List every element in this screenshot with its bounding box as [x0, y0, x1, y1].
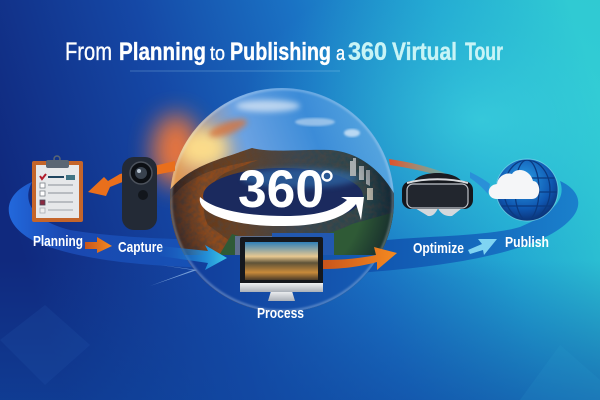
panel: capture camera	[122, 157, 157, 230]
arrow: camera to clipboard	[88, 161, 175, 196]
title: 360	[348, 38, 387, 66]
title: a	[336, 43, 346, 65]
title: Publishing	[230, 38, 331, 66]
top blue swoosh arrowhead	[470, 172, 490, 194]
arrow: process to optimize	[323, 247, 397, 270]
title: Virtual	[392, 38, 457, 66]
arrow: planning to capture	[85, 237, 112, 253]
title: to	[210, 43, 225, 65]
title	[65, 38, 503, 66]
top orange swoosh arrow	[389, 159, 445, 176]
title: Tour	[465, 38, 503, 66]
title: From	[65, 38, 112, 66]
icon: cloud	[489, 170, 539, 199]
panel: VR headset	[402, 173, 473, 216]
arrow: capture to process	[160, 245, 227, 270]
label: Capture: Capture	[118, 239, 163, 256]
right swoosh band	[320, 181, 578, 280]
light streak	[150, 265, 197, 286]
360 degree label: 360	[238, 160, 324, 219]
label: Publish: Publish	[505, 234, 549, 251]
panel: planning clipboard	[32, 156, 83, 222]
label: Process: Process	[257, 305, 304, 322]
title: Planning	[119, 38, 206, 66]
globe	[170, 88, 400, 320]
circular arrow	[200, 197, 364, 226]
panel: publish globe with cloud	[489, 159, 558, 221]
label: Planning: Planning	[33, 233, 83, 250]
panel: process monitor	[240, 237, 323, 301]
arrow: optimize to publish	[468, 239, 497, 255]
360 degree label	[200, 160, 364, 226]
label: Optimize: Optimize	[413, 240, 464, 257]
left swoosh band	[9, 182, 240, 268]
